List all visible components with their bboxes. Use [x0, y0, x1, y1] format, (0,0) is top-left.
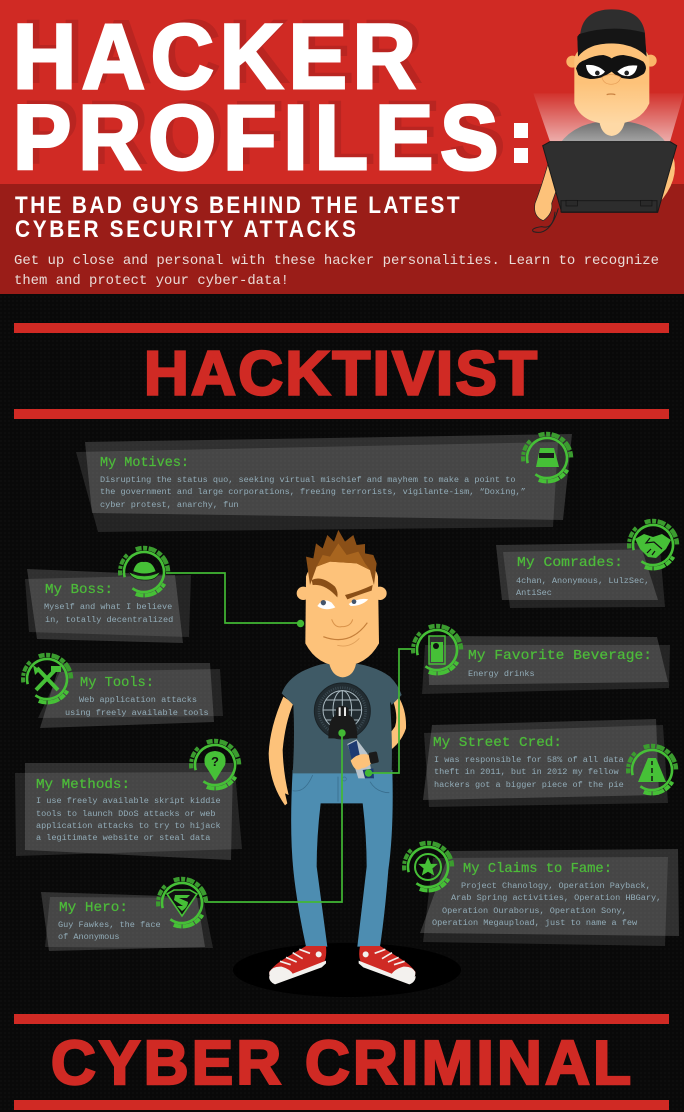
jeans	[291, 770, 393, 947]
hero heading: My Hero:	[59, 900, 128, 916]
icon: beverage glass	[405, 618, 469, 682]
street cred heading: My Street Cred:	[433, 735, 562, 751]
icon: motives mask	[515, 426, 579, 490]
panel: my hero	[41, 892, 213, 951]
title: HACKER	[21, 1, 424, 104]
hero text	[58, 920, 161, 942]
motives text: Disrupting the status quo, seeking virtual mischief and mayhem to make a point to	[100, 475, 515, 485]
character shadow	[233, 943, 461, 997]
hero text: Guy Fawkes, the face	[58, 920, 161, 930]
claims text	[432, 881, 661, 928]
icon: hero shield	[150, 871, 214, 935]
street cred text: hackers got a bigger piece of the pie	[434, 780, 624, 790]
boss text: in, totally decentralized	[45, 615, 173, 625]
header band	[0, 0, 684, 294]
panel: my motives	[76, 434, 572, 532]
methods heading: My Methods:	[36, 777, 130, 793]
boss text	[44, 602, 173, 625]
intro text: Get up close and personal with these hacker personalities. Learn to recognize	[14, 253, 659, 269]
methods text: a legitimate website or steal data	[36, 833, 210, 843]
claims text: Operation Ouraborus, Operation Sony,	[442, 906, 627, 916]
claims text: Project Chanology, Operation Payback,	[461, 881, 651, 891]
tools text: Web application attacks	[79, 695, 197, 705]
icon: methods pin	[183, 733, 247, 797]
connector: hero to shirt	[205, 729, 346, 902]
motives text	[100, 475, 526, 510]
methods text: application attacks to try to hijack	[36, 821, 221, 831]
hacker illustration	[533, 9, 684, 232]
comrades heading: My Comrades:	[517, 555, 623, 571]
panel: my boss	[25, 569, 191, 643]
methods text: I use freely available skript kiddie	[36, 796, 221, 806]
heading: cyber criminal	[14, 1014, 669, 1110]
boss heading: My Boss:	[45, 582, 113, 598]
street cred text: I was responsible for 58% of all data	[434, 755, 624, 765]
panel: my claims to fame	[420, 849, 679, 946]
title: PROFILES	[21, 82, 506, 185]
subtitle	[15, 190, 460, 242]
shoes	[269, 946, 416, 984]
heading: hacktivist: HACKTIVIST	[144, 340, 537, 408]
character: hacktivist	[269, 530, 416, 984]
intro text	[14, 253, 659, 289]
intro text: them and protect your cyber-data!	[14, 273, 289, 289]
tools heading: My Tools:	[80, 675, 154, 691]
panel: my methods	[15, 763, 242, 860]
subtitle: CYBER SECURITY ATTACKS	[15, 214, 356, 242]
comrades text	[516, 576, 649, 598]
icon: tools	[15, 647, 79, 711]
icon: street cred road	[620, 738, 684, 802]
motives text: the government and large corporations, freeing terrorists, vigilante-ism, “Doxing,”	[100, 487, 526, 497]
panel: my comrades	[496, 543, 665, 608]
beverage heading: My Favorite Beverage:	[468, 648, 652, 664]
methods text: tools to launch DDoS attacks or web	[36, 809, 216, 819]
beverage text: Energy drinks	[468, 669, 535, 679]
connector: boss to head	[166, 573, 304, 627]
panel: my favorite beverage	[422, 636, 670, 694]
title: HACKER	[13, 6, 416, 109]
heading: cyber criminal: CYBER CRIMINAL	[51, 1029, 631, 1098]
subtitle: THE BAD GUYS BEHIND THE LATEST	[15, 190, 460, 218]
claims text: Operation Megaupload, just to name a few	[432, 918, 638, 928]
icon: comrades handshake	[621, 513, 684, 577]
panel: my street cred	[423, 719, 668, 807]
claims heading: My Claims to Fame:	[463, 861, 612, 877]
tools text	[65, 695, 209, 718]
connector: beverage to can	[365, 649, 415, 777]
claims text: Arab Spring activities, Operation HBGary,	[451, 893, 661, 903]
torso and head	[269, 530, 406, 805]
tools text: using freely available tools	[65, 708, 209, 718]
comrades text: 4chan, Anonymous, LulzSec,	[516, 576, 649, 586]
motives text: cyber protest, anarchy, fun	[100, 500, 238, 510]
title: PROFILES	[13, 87, 498, 190]
panel: my tools	[38, 663, 223, 728]
icon: methods pin: ?	[211, 754, 219, 769]
comrades text: AntiSec	[516, 588, 552, 598]
methods text	[36, 796, 221, 843]
hero text: of Anonymous	[58, 932, 120, 942]
street cred text: theft in 2011, but in 2012 my fellow	[434, 767, 620, 777]
boss text: Myself and what I believe	[44, 602, 172, 612]
icon: claims star	[396, 835, 460, 899]
icon: boss hat	[112, 540, 176, 604]
title	[13, 1, 528, 190]
heading: hacktivist	[14, 323, 669, 419]
motives heading: My Motives:	[100, 455, 189, 471]
street cred text	[434, 755, 624, 790]
